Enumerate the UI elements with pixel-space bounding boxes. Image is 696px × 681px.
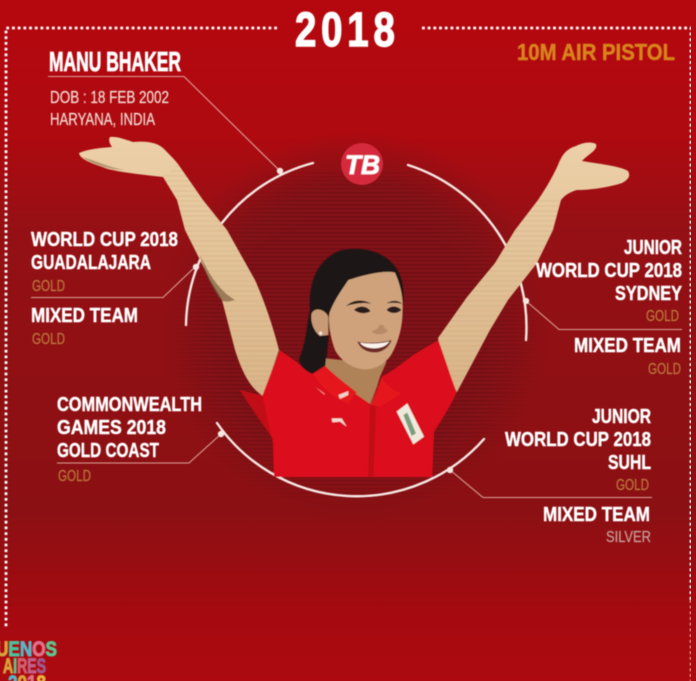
collar: [313, 366, 402, 407]
connector lines: [31, 76, 682, 498]
collar detail: [315, 387, 348, 399]
eyes: [354, 306, 401, 313]
left arm and hand: [79, 137, 279, 396]
athlete profile block: HARYANA, INDIA: [50, 109, 155, 129]
logo: [341, 143, 383, 185]
left palm shadow: [82, 157, 125, 170]
athlete profile block: [49, 46, 181, 129]
achievement: World Cup Guadalajara: MIXED TEAM: [31, 305, 138, 327]
achievement: Junior World Cup Suhl: SUHL: [608, 452, 651, 474]
achievement: Junior World Cup Sydney: [536, 237, 683, 378]
ponytail and hair: [299, 249, 403, 374]
achievement: Junior World Cup Suhl: JUNIOR: [592, 406, 651, 428]
athlete figure: [79, 137, 629, 477]
achievement: World Cup Guadalajara: GOLD: [32, 278, 65, 295]
achievement: Junior World Cup Sydney: MIXED TEAM: [574, 335, 681, 357]
achievement: Junior World Cup Sydney: SYDNEY: [615, 283, 683, 305]
nose: [372, 325, 388, 334]
face: [329, 272, 403, 369]
shirt shading: [240, 387, 377, 477]
athlete profile block: MANU BHAKER: [49, 46, 181, 77]
achievement: World Cup Guadalajara: [31, 229, 178, 348]
left arm shadow: [200, 255, 235, 302]
red shirt: [240, 340, 457, 477]
athlete profile block: DOB : 18 FEB 2002: [50, 87, 169, 107]
achievement: Commonwealth Games: GOLD: [58, 468, 91, 485]
achievement: Commonwealth Games: GOLD COAST: [57, 440, 159, 462]
achievement: Junior World Cup Suhl: GOLD: [616, 477, 649, 494]
dark striped circle backdrop: [178, 143, 532, 498]
achievement: Junior World Cup Suhl: MIXED TEAM: [543, 504, 650, 526]
circular arcs: [186, 163, 526, 496]
earring: [319, 332, 322, 335]
logo: TB: [345, 150, 380, 180]
Buenos Aires 2018 logo: AIRES: [3, 655, 46, 678]
neck: [325, 358, 387, 405]
achievement: World Cup Guadalajara: WORLD CUP 2018: [31, 229, 178, 251]
achievement: Junior World Cup Suhl: WORLD CUP 2018: [505, 429, 651, 451]
achievement: Junior World Cup Sydney: GOLD: [648, 361, 681, 378]
sleeve logo: [332, 418, 347, 427]
left arm texture: [163, 164, 279, 396]
achievement: Commonwealth Games: [57, 394, 202, 485]
achievement: Commonwealth Games: COMMONWEALTH: [57, 394, 202, 416]
right arm texture: [438, 200, 561, 392]
achievement: Junior World Cup Sydney: GOLD: [646, 308, 679, 325]
achievement: Junior World Cup Suhl: [505, 406, 651, 546]
achievement: World Cup Guadalajara: GOLD: [32, 331, 65, 348]
achievement: Commonwealth Games: GAMES 2018: [57, 417, 166, 439]
right arm and hand: [438, 143, 629, 392]
title: year: 2018: [295, 4, 400, 57]
achievement: Junior World Cup Suhl: SILVER: [606, 529, 651, 546]
Buenos Aires 2018 logo: [0, 638, 57, 681]
ear: [311, 310, 328, 336]
badge: [397, 403, 424, 444]
smile: [357, 340, 392, 352]
achievement: World Cup Guadalajara: GUADALAJARA: [31, 252, 151, 274]
eyebrows: [346, 300, 402, 306]
event heading: 10M AIR PISTOL: [517, 39, 675, 65]
